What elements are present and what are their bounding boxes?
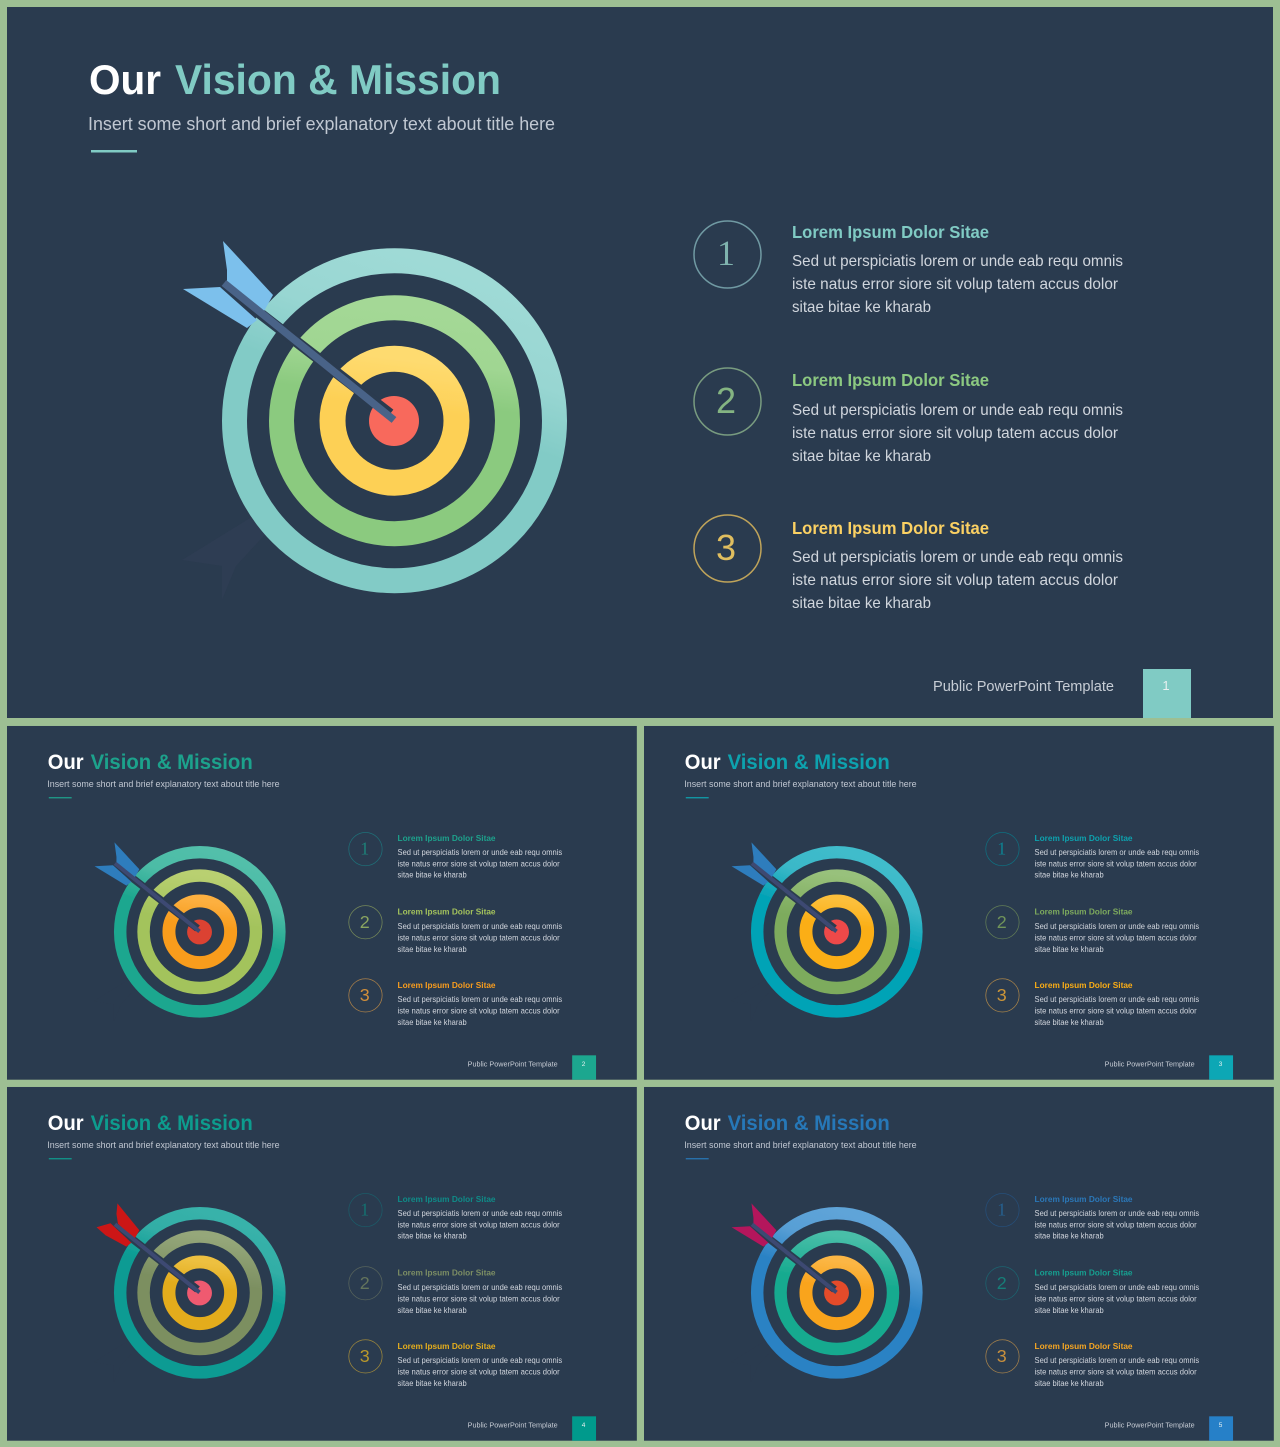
item 2: [349, 1267, 562, 1315]
item 1: sitae bitae ke kharab: [398, 871, 467, 880]
item 2: sitae bitae ke kharab: [1035, 945, 1104, 954]
item 1: 1: [717, 233, 735, 273]
title: Vision & Mission: [728, 751, 890, 774]
item 3: sitae bitae ke kharab: [792, 595, 931, 612]
item 3: Sed ut perspiciatis lorem or unde eab requ omnis: [1035, 995, 1199, 1004]
item 1: [694, 221, 1123, 316]
page number box: 1: [1162, 678, 1170, 693]
item 2: 2: [360, 1273, 370, 1293]
item 2: 2: [997, 912, 1007, 932]
item 2: sitae bitae ke kharab: [398, 945, 467, 954]
title underline: [49, 797, 72, 798]
item 2: iste natus error siore sit volup tatem accus dolor: [1035, 1294, 1197, 1303]
title: Vision & Mission: [91, 751, 253, 774]
item 3: Lorem Ipsum Dolor Sitae: [792, 518, 989, 538]
subtitle: Insert some short and brief explanatory text about title here: [684, 779, 917, 789]
item 2: [986, 1267, 1199, 1315]
item 1: [986, 832, 1199, 880]
page number box: [572, 1055, 596, 1080]
item 2: iste natus error siore sit volup tatem accus dolor: [1035, 933, 1197, 942]
item 3: Sed ut perspiciatis lorem or unde eab requ omnis: [792, 549, 1123, 566]
subtitle: Insert some short and brief explanatory text about title here: [88, 114, 555, 134]
item 1: iste natus error siore sit volup tatem accus dolor: [398, 859, 560, 868]
item 3: 3: [360, 985, 370, 1005]
item 2: Sed ut perspiciatis lorem or unde eab requ omnis: [1035, 1283, 1199, 1292]
item 1: Sed ut perspiciatis lorem or unde eab requ omnis: [1035, 848, 1199, 857]
item 2: Lorem Ipsum Dolor Sitae: [1035, 1268, 1133, 1278]
footer label: Public PowerPoint Template: [468, 1420, 558, 1429]
target with arrow: [94, 1203, 279, 1382]
item 2: sitae bitae ke kharab: [792, 448, 931, 465]
target with arrow: [94, 842, 279, 1021]
item 2: 2: [360, 912, 370, 932]
item 3: 3: [360, 1346, 370, 1366]
item 1: iste natus error siore sit volup tatem accus dolor: [792, 276, 1119, 293]
footer label: Public PowerPoint Template: [468, 1059, 558, 1068]
item 3: [986, 979, 1199, 1027]
page number box: 3: [1219, 1061, 1223, 1068]
item 2: Lorem Ipsum Dolor Sitae: [792, 370, 989, 390]
item 2: Lorem Ipsum Dolor Sitae: [1035, 907, 1133, 917]
item 3: [986, 1340, 1199, 1388]
title: Our: [89, 56, 161, 103]
item 2: [349, 906, 562, 954]
subtitle: Insert some short and brief explanatory text about title here: [684, 1140, 917, 1150]
title: Vision & Mission: [175, 56, 501, 103]
page number box: [1143, 669, 1191, 718]
item 3: Sed ut perspiciatis lorem or unde eab requ omnis: [398, 995, 562, 1004]
title underline: [686, 1158, 709, 1159]
item 3: [349, 1340, 562, 1388]
item 1: Sed ut perspiciatis lorem or unde eab requ omnis: [398, 1209, 562, 1218]
title underline: [91, 150, 137, 152]
item 3: Lorem Ipsum Dolor Sitae: [1035, 980, 1133, 990]
item 2: 2: [716, 380, 736, 421]
item 3: Lorem Ipsum Dolor Sitae: [1035, 1341, 1133, 1351]
slide 1: main panel: [7, 7, 1273, 718]
item 1: iste natus error siore sit volup tatem accus dolor: [1035, 1220, 1197, 1229]
title: Our: [48, 1112, 84, 1135]
item 1: Lorem Ipsum Dolor Sitae: [1035, 1194, 1133, 1204]
item 2: iste natus error siore sit volup tatem accus dolor: [792, 425, 1119, 442]
title: Our: [48, 751, 84, 774]
page number box: 2: [582, 1061, 586, 1068]
target with arrow: [182, 241, 554, 600]
item 3: iste natus error siore sit volup tatem accus dolor: [1035, 1007, 1197, 1016]
title underline: [49, 1158, 72, 1159]
item 2: sitae bitae ke kharab: [1035, 1306, 1104, 1315]
item 3: [349, 979, 562, 1027]
page number box: 5: [1219, 1422, 1223, 1429]
title: Vision & Mission: [728, 1112, 890, 1135]
item 1: sitae bitae ke kharab: [792, 299, 931, 316]
item 2: Sed ut perspiciatis lorem or unde eab requ omnis: [1035, 922, 1199, 931]
item 3: sitae bitae ke kharab: [1035, 1018, 1104, 1027]
item 2: iste natus error siore sit volup tatem accus dolor: [398, 933, 560, 942]
item 3: Sed ut perspiciatis lorem or unde eab requ omnis: [1035, 1356, 1199, 1365]
page number box: 4: [582, 1422, 586, 1429]
footer label: Public PowerPoint Template: [933, 679, 1114, 695]
item 1: 1: [360, 838, 369, 858]
item 2: Lorem Ipsum Dolor Sitae: [398, 907, 496, 917]
item 3: iste natus error siore sit volup tatem accus dolor: [398, 1368, 560, 1377]
title: Vision & Mission: [91, 1112, 253, 1135]
item 1: 1: [997, 838, 1006, 858]
item 1: iste natus error siore sit volup tatem accus dolor: [398, 1220, 560, 1229]
subtitle: Insert some short and brief explanatory text about title here: [47, 1140, 280, 1150]
item 2: [986, 906, 1199, 954]
item 1: iste natus error siore sit volup tatem accus dolor: [1035, 859, 1197, 868]
item 1: sitae bitae ke kharab: [1035, 1232, 1104, 1241]
item 3: sitae bitae ke kharab: [398, 1379, 467, 1388]
item 2: sitae bitae ke kharab: [398, 1306, 467, 1315]
item 2: Sed ut perspiciatis lorem or unde eab requ omnis: [398, 1283, 562, 1292]
item 3: 3: [716, 527, 736, 568]
item 3: [694, 515, 1123, 612]
item 3: iste natus error siore sit volup tatem accus dolor: [792, 572, 1119, 589]
footer label: Public PowerPoint Template: [1105, 1420, 1195, 1429]
item 1: [349, 1193, 562, 1241]
item 2: Lorem Ipsum Dolor Sitae: [398, 1268, 496, 1278]
item 1: Sed ut perspiciatis lorem or unde eab requ omnis: [1035, 1209, 1199, 1218]
item 3: sitae bitae ke kharab: [398, 1018, 467, 1027]
item 1: Sed ut perspiciatis lorem or unde eab requ omnis: [792, 253, 1123, 270]
item 2: 2: [997, 1273, 1007, 1293]
item 2: Sed ut perspiciatis lorem or unde eab requ omnis: [792, 402, 1123, 419]
item 1: Lorem Ipsum Dolor Sitae: [1035, 833, 1133, 843]
title: Our: [685, 751, 721, 774]
item 1: Lorem Ipsum Dolor Sitae: [398, 833, 496, 843]
item 3: Sed ut perspiciatis lorem or unde eab requ omnis: [398, 1356, 562, 1365]
slide 5: blue panel: [644, 1087, 1274, 1441]
item 3: iste natus error siore sit volup tatem accus dolor: [398, 1007, 560, 1016]
page number box: [1209, 1416, 1233, 1441]
item 1: sitae bitae ke kharab: [398, 1232, 467, 1241]
item 3: sitae bitae ke kharab: [1035, 1379, 1104, 1388]
item 1: 1: [997, 1199, 1006, 1219]
item 1: sitae bitae ke kharab: [1035, 871, 1104, 880]
title: Our: [685, 1112, 721, 1135]
item 3: Lorem Ipsum Dolor Sitae: [398, 1341, 496, 1351]
item 1: Lorem Ipsum Dolor Sitae: [398, 1194, 496, 1204]
slide 3: cyan panel: [644, 726, 1274, 1080]
item 1: Sed ut perspiciatis lorem or unde eab requ omnis: [398, 848, 562, 857]
footer label: Public PowerPoint Template: [1105, 1059, 1195, 1068]
slide 2: teal and orange panel: [7, 726, 637, 1080]
item 3: 3: [997, 1346, 1007, 1366]
item 2: iste natus error siore sit volup tatem accus dolor: [398, 1294, 560, 1303]
subtitle: Insert some short and brief explanatory text about title here: [47, 779, 280, 789]
slide 4: teal and red panel: [7, 1087, 637, 1441]
item 3: Lorem Ipsum Dolor Sitae: [398, 980, 496, 990]
item 3: iste natus error siore sit volup tatem accus dolor: [1035, 1368, 1197, 1377]
target with arrow: [731, 842, 916, 1021]
item 1: [986, 1193, 1199, 1241]
item 1: [349, 832, 562, 880]
title underline: [686, 797, 709, 798]
target with arrow: [731, 1203, 916, 1382]
item 2: Sed ut perspiciatis lorem or unde eab requ omnis: [398, 922, 562, 931]
page number box: [1209, 1055, 1233, 1080]
page number box: [572, 1416, 596, 1441]
item 2: [694, 368, 1123, 465]
item 1: 1: [360, 1199, 369, 1219]
item 1: Lorem Ipsum Dolor Sitae: [792, 222, 989, 242]
item 3: 3: [997, 985, 1007, 1005]
